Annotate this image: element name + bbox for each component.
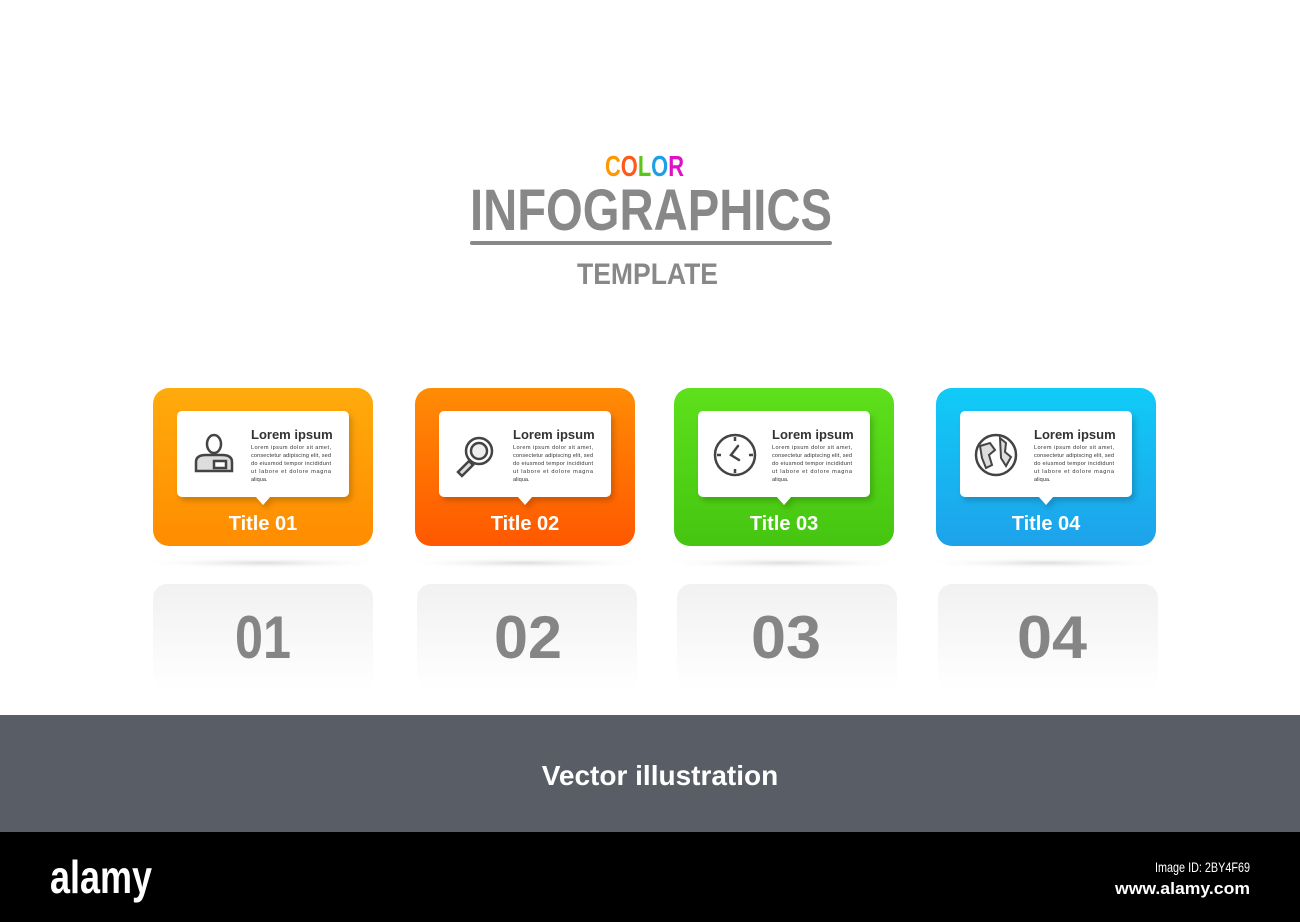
card 2: Lorem ipsum dolor sit amet, bbox=[513, 445, 593, 451]
card 3: Lorem ipsum bbox=[772, 427, 854, 442]
card 4: Title 04 bbox=[1012, 513, 1081, 535]
card 2: consectetur adipiscing elit, sed bbox=[513, 453, 593, 459]
footer: alamy bbox=[50, 851, 152, 903]
card 2: aliqua. bbox=[513, 477, 530, 483]
footer bbox=[0, 832, 1300, 922]
card 2: do eiusmod tempor incididunt bbox=[513, 461, 593, 467]
card 3: Lorem ipsum dolor sit amet, bbox=[772, 445, 852, 451]
card 3: ut labore et dolore magna bbox=[772, 469, 853, 475]
card 4: aliqua. bbox=[1034, 477, 1051, 483]
card 1: aliqua. bbox=[251, 477, 268, 483]
card 1: Lorem ipsum bbox=[251, 427, 333, 442]
number tiles: 01 bbox=[235, 604, 291, 671]
number tiles bbox=[153, 584, 1158, 690]
title underline bbox=[470, 241, 832, 245]
card 2 bbox=[395, 388, 655, 569]
card 4: consectetur adipiscing elit, sed bbox=[1034, 453, 1114, 459]
band: vector illustration bbox=[0, 715, 1300, 832]
card 4: Lorem ipsum dolor sit amet, bbox=[1034, 445, 1114, 451]
footer: Image ID: 2BY4F69 bbox=[1155, 859, 1250, 875]
icon: person bbox=[196, 435, 232, 471]
footer: www.alamy.com bbox=[1114, 879, 1250, 898]
card 1: Lorem ipsum dolor sit amet, bbox=[251, 445, 331, 451]
card 4: do eiusmod tempor incididunt bbox=[1034, 461, 1114, 467]
card 3: consectetur adipiscing elit, sed bbox=[772, 453, 852, 459]
icon: clock bbox=[715, 435, 755, 475]
card 1: consectetur adipiscing elit, sed bbox=[251, 453, 331, 459]
card 2: Title 02 bbox=[491, 513, 559, 535]
card 3: do eiusmod tempor incididunt bbox=[772, 461, 852, 467]
number tiles: 04 bbox=[1017, 604, 1088, 671]
card 3: Title 03 bbox=[750, 513, 818, 535]
band: vector illustration: Vector illustration bbox=[542, 760, 778, 791]
icon: globe bbox=[976, 435, 1016, 475]
card 4: Lorem ipsum bbox=[1034, 427, 1116, 442]
card 1: do eiusmod tempor incididunt bbox=[251, 461, 331, 467]
card 1: Title 01 bbox=[229, 513, 297, 535]
card 1: ut labore et dolore magna bbox=[251, 469, 332, 475]
card 2: ut labore et dolore magna bbox=[513, 469, 594, 475]
card 1 bbox=[133, 388, 393, 569]
card 3: aliqua. bbox=[772, 477, 789, 483]
number tiles: 03 bbox=[751, 604, 821, 671]
title: INFOGRAPHICS: INFOGRAPHICS bbox=[470, 178, 832, 243]
title: COLOR: COLOR bbox=[605, 151, 684, 183]
card 2: Lorem ipsum bbox=[513, 427, 595, 442]
number tiles: 02 bbox=[494, 604, 562, 671]
card 4: ut labore et dolore magna bbox=[1034, 469, 1115, 475]
subtitle: TEMPLATE: TEMPLATE bbox=[577, 258, 718, 291]
card 3 bbox=[654, 388, 914, 569]
icon: magnifier bbox=[458, 438, 492, 476]
card 4 bbox=[916, 388, 1176, 569]
